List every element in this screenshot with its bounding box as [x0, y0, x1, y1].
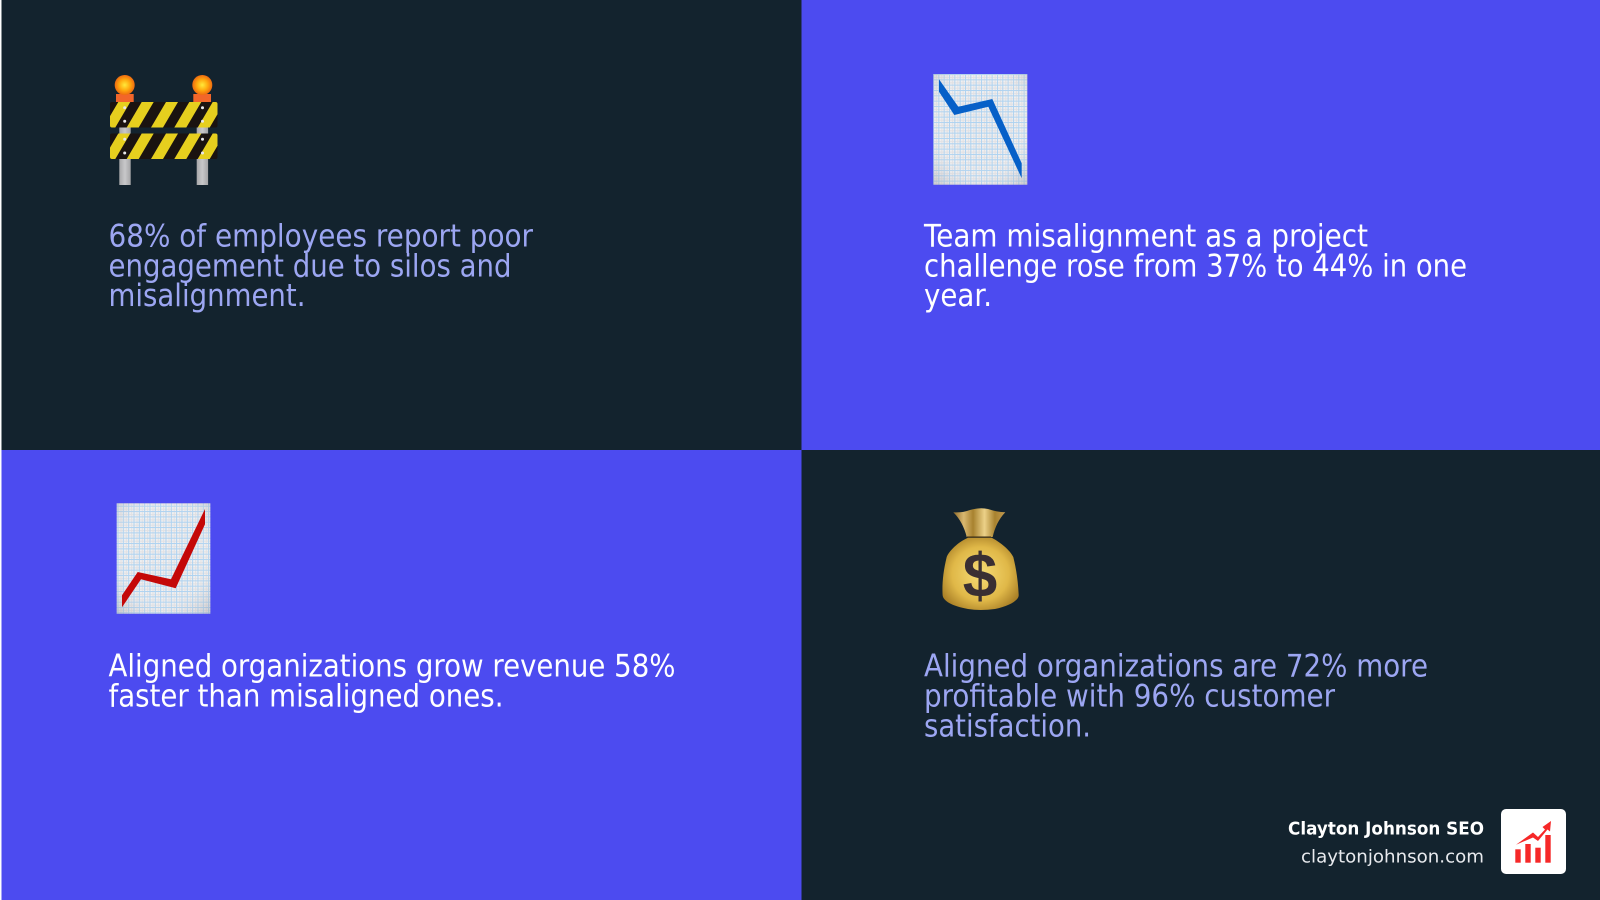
panel: bottom-left blue panel: [2, 450, 802, 900]
text block: team misalignment statistic: year.: [924, 278, 992, 314]
text block: team misalignment statistic: challenge rose from 37% to 44% in one: [924, 248, 1467, 284]
text block: employee engagement statistic: misalignment.: [108, 278, 306, 314]
icon: rising chart: [117, 503, 210, 614]
panel: top-left dark panel: [2, 0, 802, 450]
text block: team misalignment statistic: Team misalignment as a project: [923, 218, 1368, 254]
icon: construction barrier: [110, 75, 218, 185]
icon: falling chart: [933, 74, 1027, 185]
text block: team misalignment statistic: [923, 218, 1467, 314]
brand url: claytonjohnson.com: [1301, 846, 1484, 868]
text block: profitability statistic: Aligned organizations are 72% more: [924, 648, 1428, 684]
text block: profitability statistic: [924, 648, 1428, 744]
panel: top-right blue panel: [802, 0, 1600, 450]
text block: revenue growth statistic: [108, 648, 676, 714]
text block: revenue growth statistic: faster than misaligned ones.: [108, 678, 504, 714]
panel: bottom-right dark panel: [802, 450, 1600, 900]
icon: money bag: $: [963, 542, 997, 611]
text block: profitability statistic: satisfaction.: [924, 708, 1091, 744]
text block: employee engagement statistic: 68% of employees report poor: [108, 218, 533, 254]
icon: money bag: [942, 508, 1019, 611]
text block: employee engagement statistic: [108, 218, 533, 314]
icon: brand logo: [1501, 809, 1566, 874]
text block: revenue growth statistic: Aligned organizations grow revenue 58%: [108, 648, 676, 684]
text block: employee engagement statistic: engagement due to silos and: [108, 248, 512, 284]
text block: profitability statistic: profitable with 96% customer: [924, 678, 1335, 714]
brand name: Clayton Johnson SEO: [1288, 820, 1484, 840]
